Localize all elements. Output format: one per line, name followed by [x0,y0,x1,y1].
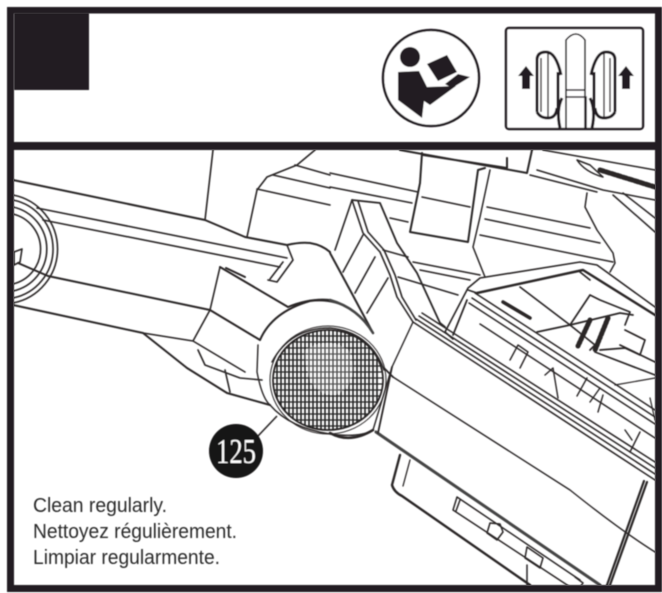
panel: product illustration [13,150,655,593]
icon: read the manual [383,30,479,126]
nozzle with mesh filter [257,300,600,585]
body with rails and slots [378,293,655,593]
black square [14,13,89,90]
tray [445,262,655,375]
callout: part number badge: 125 [216,432,256,471]
background housing [330,150,655,295]
icon: wheels lifted [506,28,643,129]
instruction text: Clean regularly. [33,495,167,517]
panel: header [14,13,643,129]
instruction text: Limpiar regularmente. [33,547,220,569]
handle arm [13,150,330,405]
callout: part number badge [209,416,277,478]
instruction text: Nettoyez régulièrement. [33,521,237,543]
instruction text [33,495,237,569]
wedge panel [330,200,445,333]
